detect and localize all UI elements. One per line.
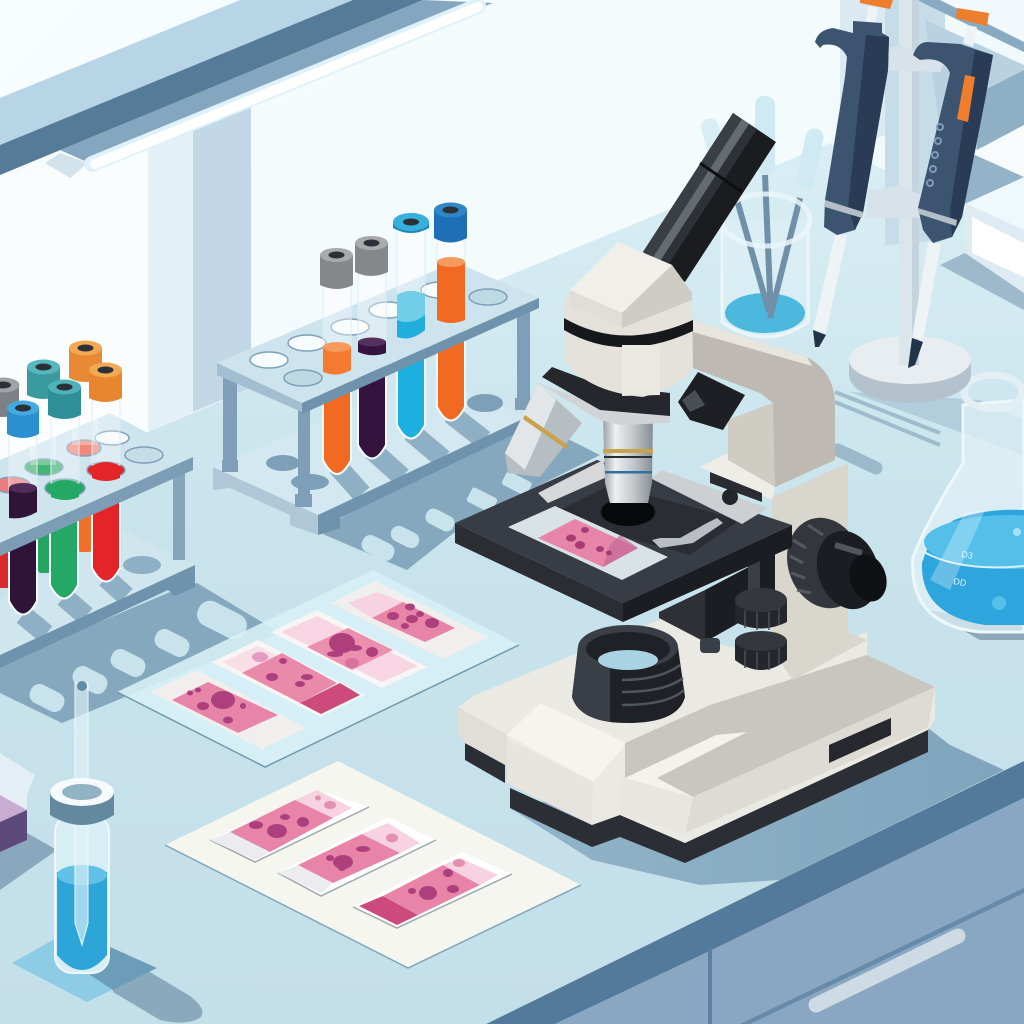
flask graduation labels	[953, 549, 974, 588]
flask graduation labels: DD	[953, 576, 968, 588]
slide 2	[278, 817, 436, 896]
side knob	[678, 372, 745, 430]
lower tube: green	[50, 510, 78, 598]
paper sheet with three slides	[165, 761, 581, 968]
nosepiece	[538, 367, 670, 425]
rack front leg	[295, 410, 312, 507]
upper tube: green	[48, 380, 81, 500]
slide 4	[150, 670, 306, 749]
pipette dial markings	[927, 124, 943, 186]
conical flask with blue liquid	[913, 375, 1024, 640]
droppers	[699, 96, 825, 318]
lamp collector	[572, 625, 685, 723]
beaker with droppers	[699, 96, 825, 337]
flask graduation labels: D3	[961, 549, 974, 561]
lower tube: red	[92, 490, 120, 582]
rack base	[0, 530, 195, 668]
left test tube rack	[0, 340, 195, 668]
upper tube: gray cap stub	[0, 378, 20, 417]
lower tube: tall orange	[437, 325, 465, 420]
eyepiece	[643, 113, 776, 282]
slide 3	[212, 640, 365, 717]
drawer handle	[816, 936, 958, 1005]
upper tube: back teal cap	[27, 360, 60, 465]
glass plate with four slides	[117, 570, 519, 767]
rack base	[213, 375, 527, 535]
slide 1	[210, 790, 369, 862]
microscope	[455, 113, 935, 863]
slide 2	[271, 610, 427, 688]
objectives	[505, 383, 653, 503]
lower tube: dark purple	[358, 365, 386, 458]
slide 1	[331, 581, 488, 659]
right pipette	[908, 8, 993, 368]
stage support	[659, 553, 775, 653]
left pipette	[813, 0, 893, 347]
fine focus knobs	[735, 560, 787, 670]
lower tube: blue	[397, 345, 425, 438]
shadows of pipette stand and column	[0, 392, 1024, 890]
upper tube: dark purple	[7, 400, 39, 518]
lower tube: back red	[0, 520, 20, 588]
stage	[455, 460, 792, 622]
rack top plate	[0, 413, 193, 556]
base	[458, 612, 935, 843]
specimen box at left edge	[0, 753, 35, 852]
right test tube rack	[213, 202, 539, 535]
upper tube: dark purple	[355, 236, 388, 355]
lower tube: dark purple	[9, 520, 37, 614]
rack legs	[222, 306, 532, 472]
upper tube: blue	[393, 213, 429, 338]
shadow of left rack	[0, 583, 280, 723]
wall column	[148, 107, 251, 432]
lower tube: back orange	[78, 495, 92, 552]
upper tube: back orange cap	[69, 340, 102, 445]
upper tube: tall orange	[434, 202, 467, 323]
graduated tube on glass stand	[12, 681, 202, 1023]
bench cabinet front	[480, 761, 1024, 1024]
head	[564, 242, 693, 397]
ceiling shelf	[0, 0, 493, 178]
pipette stand	[849, 0, 971, 403]
back right wall shelves	[840, 0, 1024, 310]
slide 3	[353, 852, 512, 928]
shadow of right rack	[318, 420, 600, 570]
rack leg	[173, 466, 185, 560]
rack top plate	[217, 262, 539, 414]
lower tube: orange	[323, 380, 351, 474]
upper tube: red	[89, 362, 122, 481]
lower tube: back green	[38, 505, 52, 573]
arm column	[690, 320, 867, 680]
upper tube: orange	[320, 248, 353, 375]
base feet	[465, 728, 928, 863]
coarse focus knob	[776, 508, 893, 618]
shadow of microscope base	[510, 728, 1004, 885]
slide on stage	[508, 506, 668, 580]
